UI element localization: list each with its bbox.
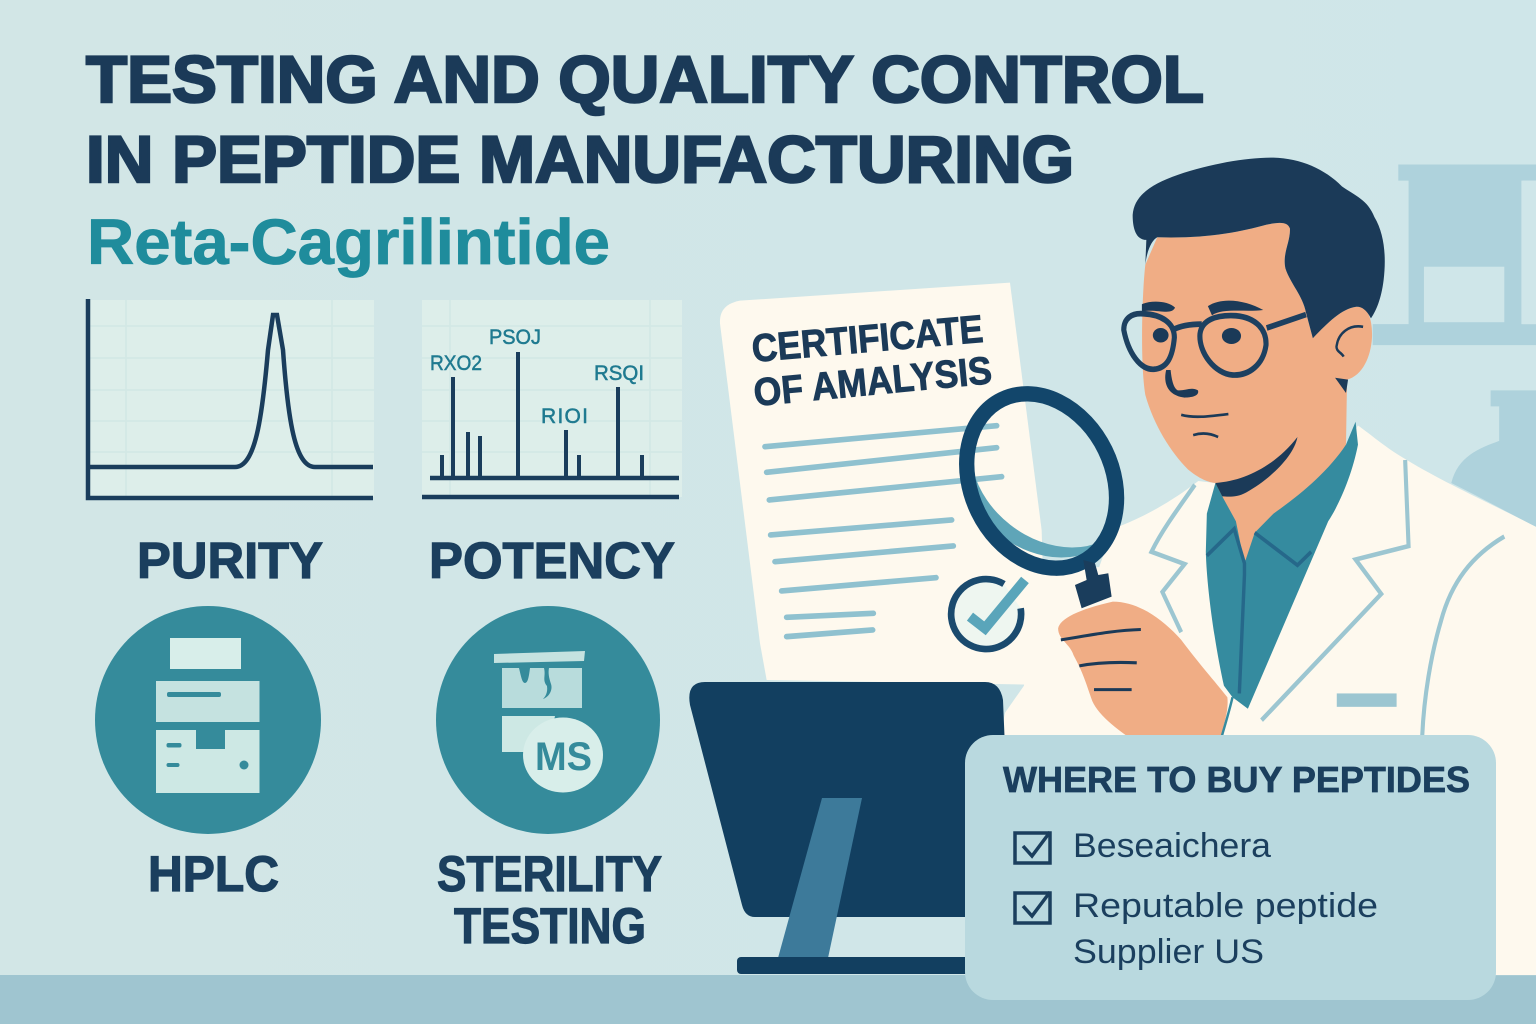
label: sterility testing: TESTING bbox=[454, 898, 646, 954]
document text lines bbox=[765, 426, 1002, 637]
label: sterility testing bbox=[437, 846, 662, 954]
magnifying glass bbox=[959, 386, 1124, 608]
potency mass spectrum chart: RXO2 bbox=[430, 352, 482, 375]
face details bbox=[1142, 301, 1348, 398]
title: IN PEPTIDE MANUFACTURING bbox=[86, 122, 1074, 196]
scientist bbox=[1000, 158, 1536, 975]
computer monitor bbox=[689, 682, 1012, 974]
potency mass spectrum chart bbox=[422, 300, 682, 497]
label: purity: PURITY bbox=[137, 532, 323, 589]
head and neck bbox=[1142, 223, 1372, 563]
certificate heading bbox=[750, 308, 994, 415]
panel heading: WHERE TO BUY PEPTIDES bbox=[1003, 759, 1470, 800]
panel: where to buy peptides bbox=[965, 735, 1496, 1000]
hair bbox=[1133, 158, 1385, 338]
certificate heading: OF AMALYSIS bbox=[752, 349, 994, 415]
approval check mark bbox=[951, 579, 1025, 649]
checkbox: Reputable peptide supplier bbox=[1015, 892, 1050, 923]
lab coat bbox=[1000, 426, 1536, 975]
title bbox=[86, 42, 1204, 196]
coat pocket bbox=[1337, 693, 1397, 707]
label: sterility testing: STERILITY bbox=[437, 846, 662, 902]
label: potency: POTENCY bbox=[429, 532, 675, 589]
potency mass spectrum chart: PSOJ bbox=[489, 326, 541, 349]
shirt bbox=[1206, 422, 1358, 709]
coat lapel lines bbox=[1151, 460, 1504, 736]
collar lines bbox=[1207, 529, 1311, 693]
label: HPLC: HPLC bbox=[148, 846, 279, 902]
list item 2: Supplier US bbox=[1073, 933, 1264, 971]
certificate heading: CERTIFICATE bbox=[750, 308, 985, 371]
subtitle: Reta-Cagrilintide bbox=[87, 206, 610, 278]
purity chromatogram chart bbox=[87, 299, 374, 498]
potency mass spectrum chart: RSQI bbox=[594, 362, 644, 385]
checkbox: Beseaichera bbox=[1015, 832, 1050, 863]
icon: sterility and MS test: MS bbox=[535, 735, 592, 779]
glasses bbox=[1124, 314, 1306, 375]
title: TESTING AND QUALITY CONTROL bbox=[86, 42, 1204, 116]
background lab shelf and flask bbox=[1373, 165, 1536, 527]
icon: HPLC instrument bbox=[95, 606, 321, 834]
list item 2 bbox=[1073, 887, 1378, 971]
floor strip bbox=[0, 975, 1536, 1024]
certificate document bbox=[720, 283, 1047, 685]
icon: sterility and MS test bbox=[436, 606, 660, 834]
chin shadow bbox=[1215, 437, 1297, 497]
potency mass spectrum chart: RIOI bbox=[541, 405, 588, 428]
hand bbox=[1058, 602, 1232, 747]
list item 2: Reputable peptide bbox=[1073, 887, 1378, 925]
list item 1: Beseaichera bbox=[1073, 827, 1271, 865]
mouth and ear lines bbox=[1181, 326, 1363, 437]
